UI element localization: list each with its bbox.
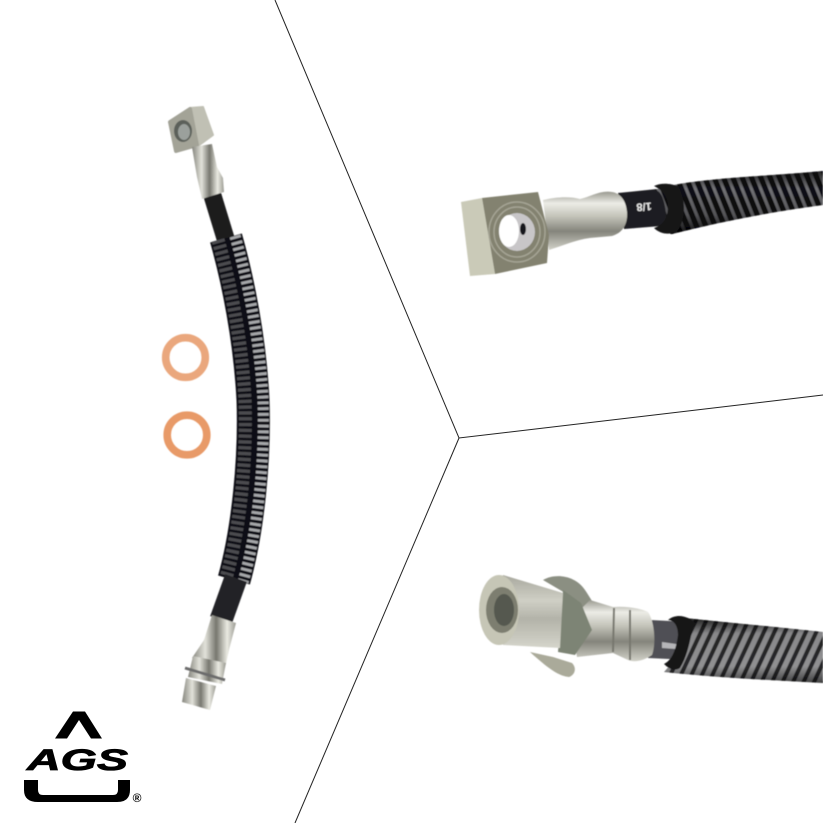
neck ridges bbox=[613, 608, 630, 660]
collar bbox=[558, 590, 592, 655]
side port bbox=[520, 223, 526, 235]
threaded bore bbox=[486, 587, 518, 633]
bottom wing bbox=[530, 652, 575, 677]
block side bbox=[461, 198, 495, 276]
registered mark: ® bbox=[133, 791, 142, 805]
logo wordmark: AGS bbox=[25, 744, 128, 777]
logo top chevron bbox=[55, 712, 102, 738]
bare hose bbox=[618, 186, 686, 229]
top wing bbox=[543, 576, 604, 632]
copper washer bottom bbox=[167, 415, 207, 455]
lower bare hose bbox=[221, 578, 236, 620]
bore bbox=[499, 213, 535, 251]
bare hose bbox=[648, 620, 690, 660]
spring guard bbox=[664, 617, 823, 683]
top banjo fitting bbox=[170, 107, 224, 199]
hose size marking: 1/8 bbox=[636, 199, 652, 213]
upper bare hose bbox=[212, 194, 226, 240]
block face bbox=[482, 192, 549, 274]
full hose assembly bbox=[170, 107, 263, 710]
coiled spring guard bbox=[218, 236, 263, 582]
dividing lines bbox=[275, 0, 823, 823]
spring guard lip bbox=[664, 616, 694, 670]
cylinder face bbox=[479, 575, 519, 645]
bottom fitting bbox=[182, 615, 236, 710]
spring guard bbox=[654, 171, 823, 234]
AGS logo bbox=[24, 712, 142, 805]
barrel fitting bbox=[543, 192, 627, 250]
bottom-right detail: threaded end bbox=[479, 575, 823, 683]
copper washer top bbox=[166, 338, 205, 377]
cylinder body bbox=[503, 575, 563, 648]
logo bottom bracket bbox=[24, 780, 130, 802]
spring guard opening bbox=[654, 184, 684, 234]
hose marking bbox=[662, 642, 690, 650]
top-right detail: banjo end bbox=[461, 171, 823, 276]
neck fitting bbox=[570, 600, 654, 661]
machined rings bbox=[489, 202, 545, 262]
